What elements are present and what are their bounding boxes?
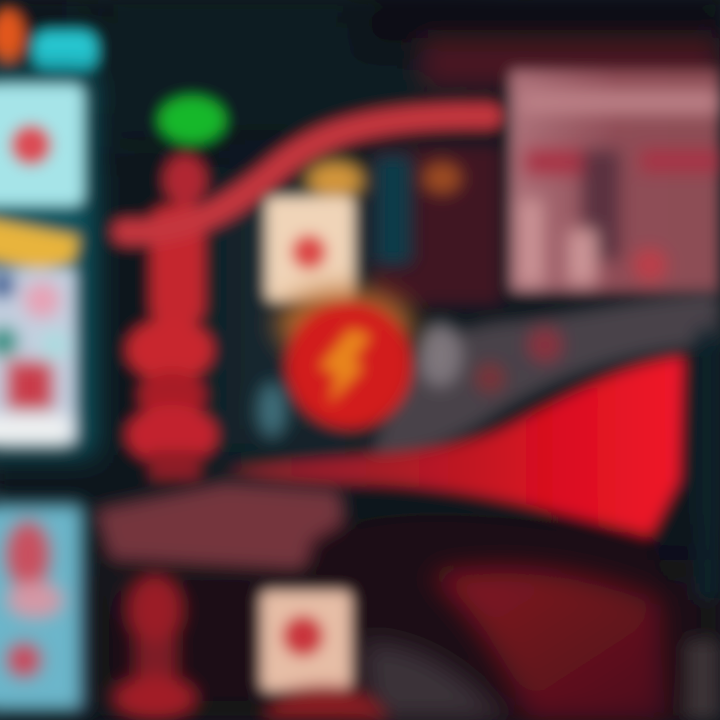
red lower reflection bbox=[430, 568, 665, 720]
red trend curve bbox=[125, 116, 490, 232]
right lower gray bbox=[685, 640, 720, 720]
left reflection panel bbox=[0, 505, 82, 710]
icon: red dot on tile bbox=[292, 235, 326, 269]
orange tag behind card bbox=[305, 160, 365, 200]
gray lower reflection bbox=[360, 640, 510, 720]
panel: lower card bbox=[0, 268, 76, 442]
lower card details bbox=[0, 273, 70, 444]
yellow banner bbox=[0, 214, 80, 272]
icon: red ball with bolt bbox=[286, 303, 412, 429]
reflected red column bbox=[113, 574, 197, 720]
icon: reflected red dot bbox=[283, 616, 323, 656]
red candlestick column bbox=[126, 154, 218, 480]
table band bbox=[95, 482, 345, 570]
icon: green blob bbox=[158, 96, 226, 144]
icon: cyan pill bbox=[32, 30, 98, 72]
gray wave bbox=[370, 292, 720, 460]
panel glow bbox=[0, 70, 95, 455]
icon: orange tile bbox=[0, 8, 25, 64]
reflected red ball bbox=[262, 688, 388, 720]
reflected card bbox=[260, 590, 352, 692]
icon: red dot on card bbox=[11, 125, 51, 165]
panel: top card bbox=[0, 84, 84, 206]
red area chart bbox=[225, 356, 684, 538]
right edge dark post bbox=[696, 330, 720, 600]
panel: dark maroon centre panel bbox=[372, 145, 502, 305]
panel: pink data board bbox=[510, 70, 720, 292]
card: cream tile bbox=[265, 196, 355, 302]
dark lower sweep bbox=[310, 514, 685, 720]
orange halo around ball bbox=[277, 289, 413, 361]
pale blue ball shadow bbox=[258, 382, 286, 438]
left column of app panels bbox=[0, 8, 98, 455]
